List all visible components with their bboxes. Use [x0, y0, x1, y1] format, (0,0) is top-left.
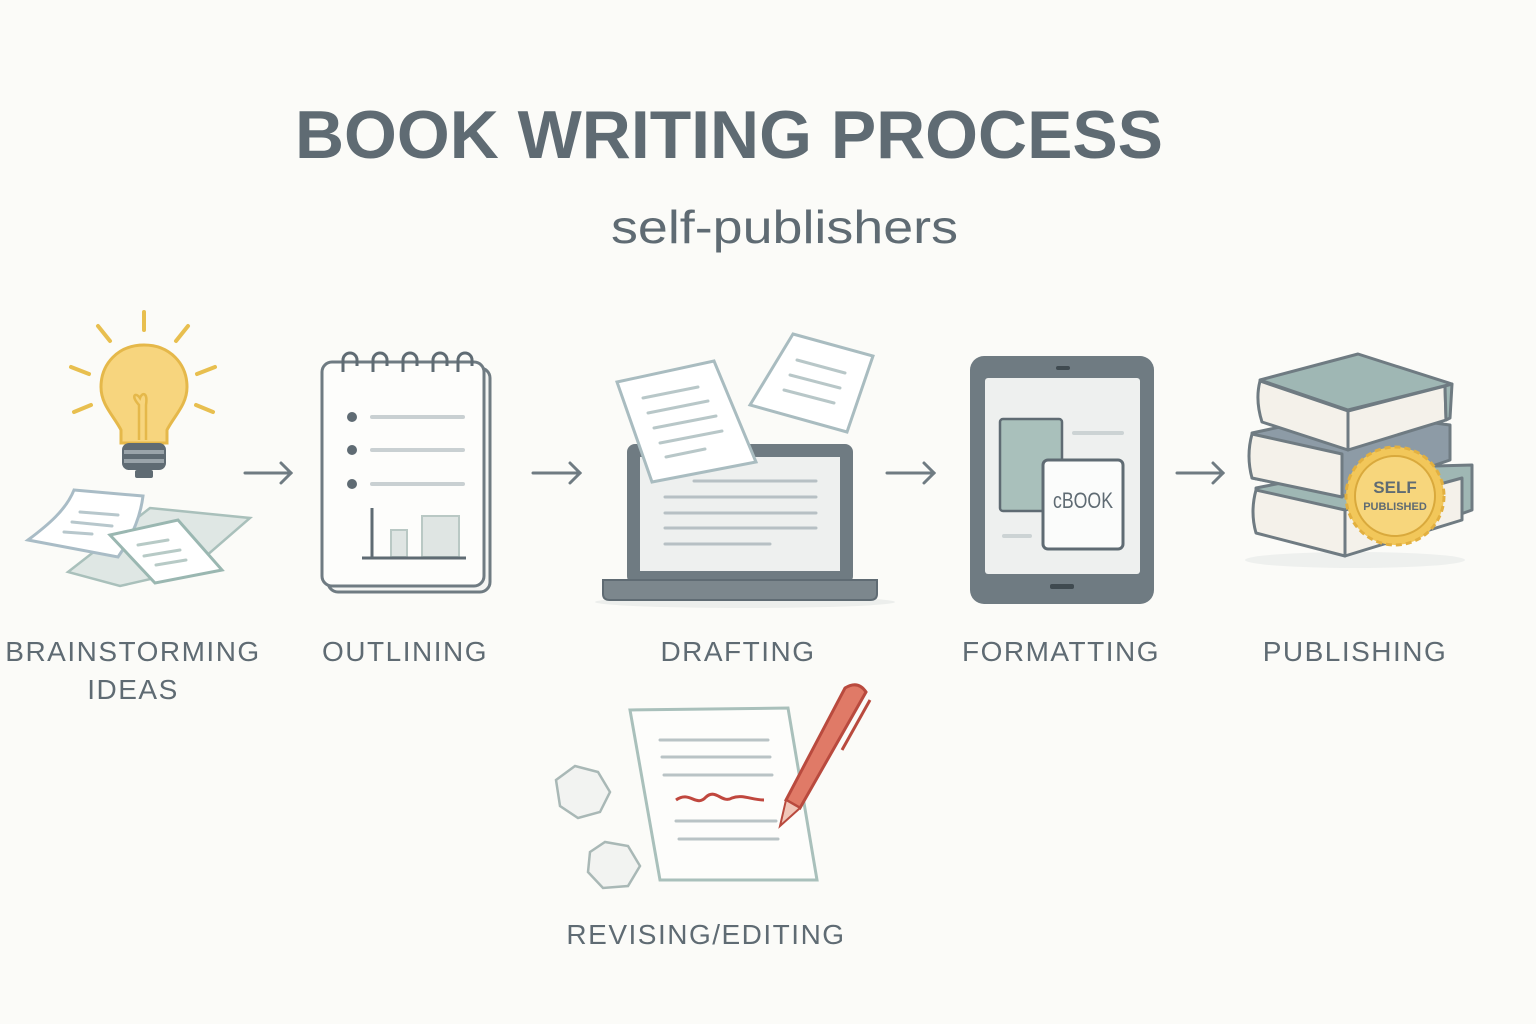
arrow 4 — [1177, 463, 1223, 483]
icon: notepad — [322, 353, 490, 592]
label: outlining: OUTLINING — [322, 636, 488, 667]
subtitle: self-publishers — [611, 201, 958, 253]
arrow 2 — [533, 463, 580, 483]
label: brainstorming ideas: BRAINSTORMING — [5, 636, 261, 667]
label: formatting: FORMATTING — [962, 636, 1160, 667]
seal: self published: SELF — [1373, 478, 1417, 497]
label: publishing: PUBLISHING — [1263, 636, 1447, 667]
seal: self published — [1346, 447, 1444, 545]
icon: revising page with pen — [556, 685, 870, 888]
icon: book stack with seal — [1245, 354, 1472, 568]
label: revising/editing: REVISING/EDITING — [566, 919, 846, 950]
arrow 1 — [245, 463, 291, 483]
label: brainstorming ideas: IDEAS — [87, 674, 179, 705]
arrow 3 — [887, 463, 934, 483]
icon: lightbulb with papers — [28, 312, 250, 586]
title: BOOK WRITING PROCESS — [295, 97, 1163, 173]
icon: laptop with pages — [595, 334, 895, 608]
icon: tablet ebook: cBOOK — [1053, 488, 1113, 513]
seal: self published: PUBLISHED — [1363, 501, 1427, 513]
label: brainstorming ideas — [5, 636, 261, 705]
label: drafting: DRAFTING — [660, 636, 816, 667]
icon: tablet ebook — [970, 356, 1154, 604]
